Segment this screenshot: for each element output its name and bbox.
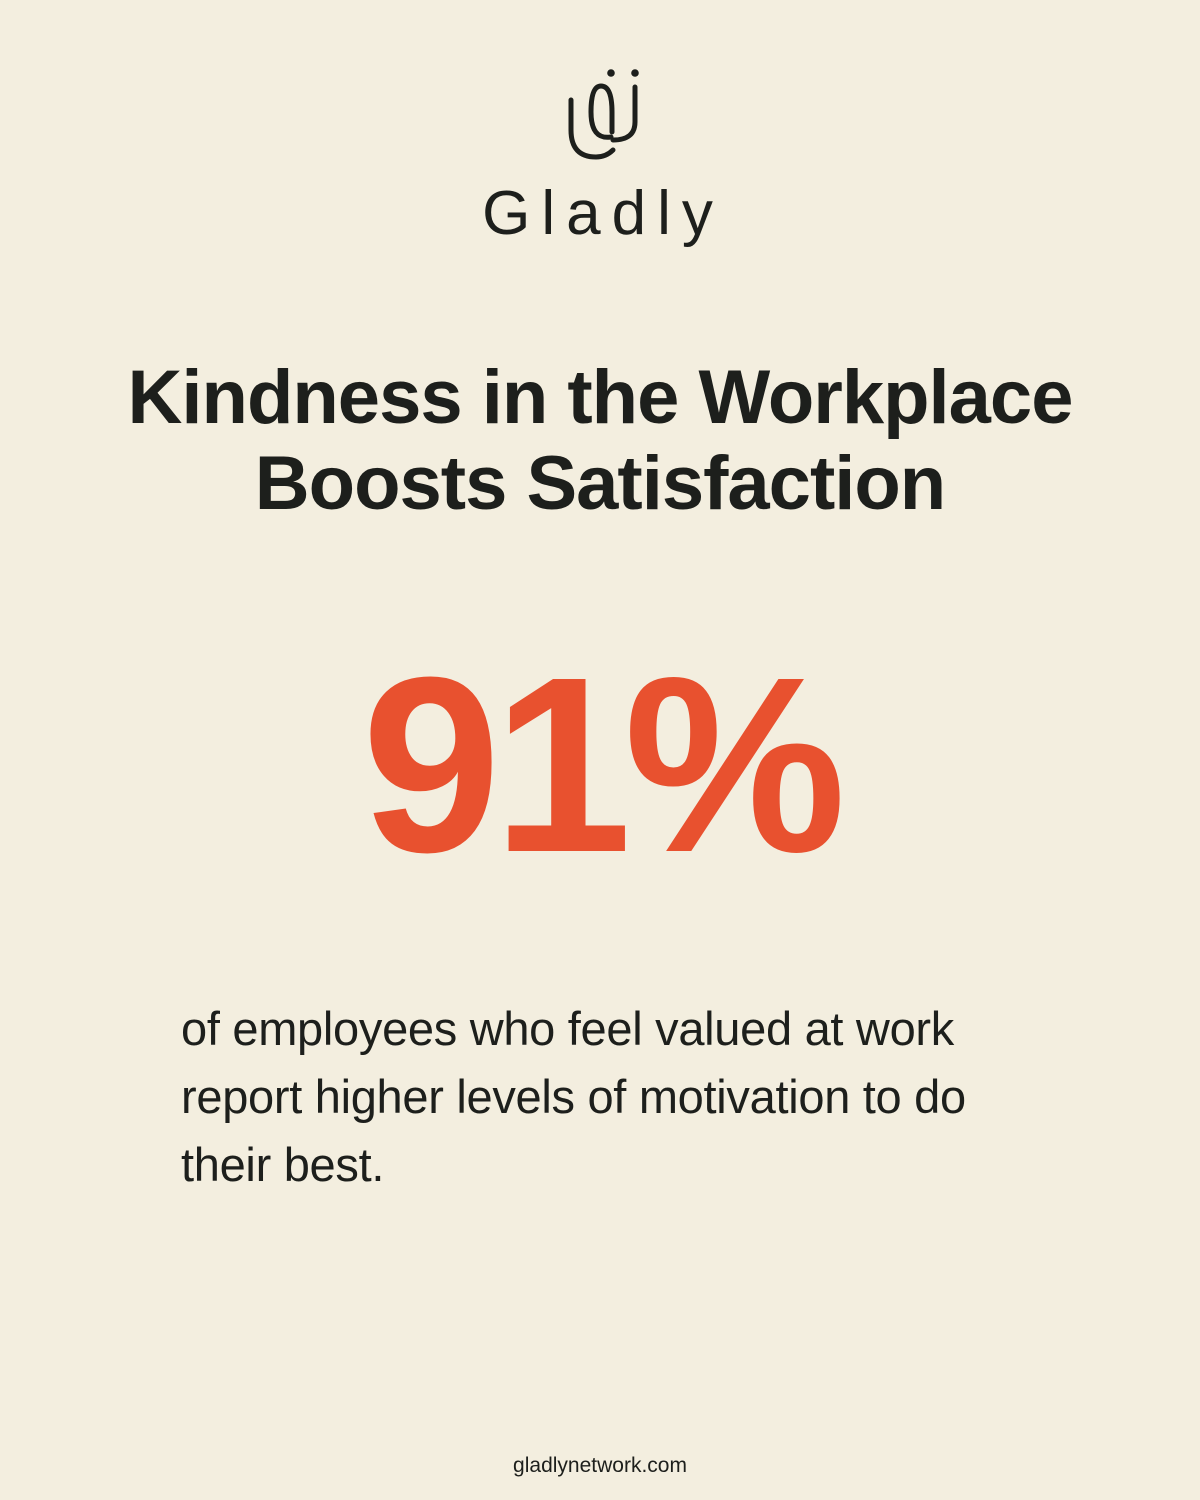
title: Boosts Satisfaction: [255, 441, 945, 526]
description: their best.: [181, 1138, 384, 1191]
brand name: Gladly: [482, 179, 724, 248]
title: Kindness in the Workplace: [128, 355, 1072, 440]
logo icon: [568, 69, 639, 160]
description: [181, 1002, 966, 1191]
description: of employees who feel valued at work: [181, 1002, 954, 1055]
title: [128, 355, 1072, 526]
footer url: gladlynetwork.com: [513, 1454, 687, 1477]
big statistic: 91%: [362, 625, 838, 904]
description: report higher levels of motivation to do: [181, 1070, 966, 1123]
